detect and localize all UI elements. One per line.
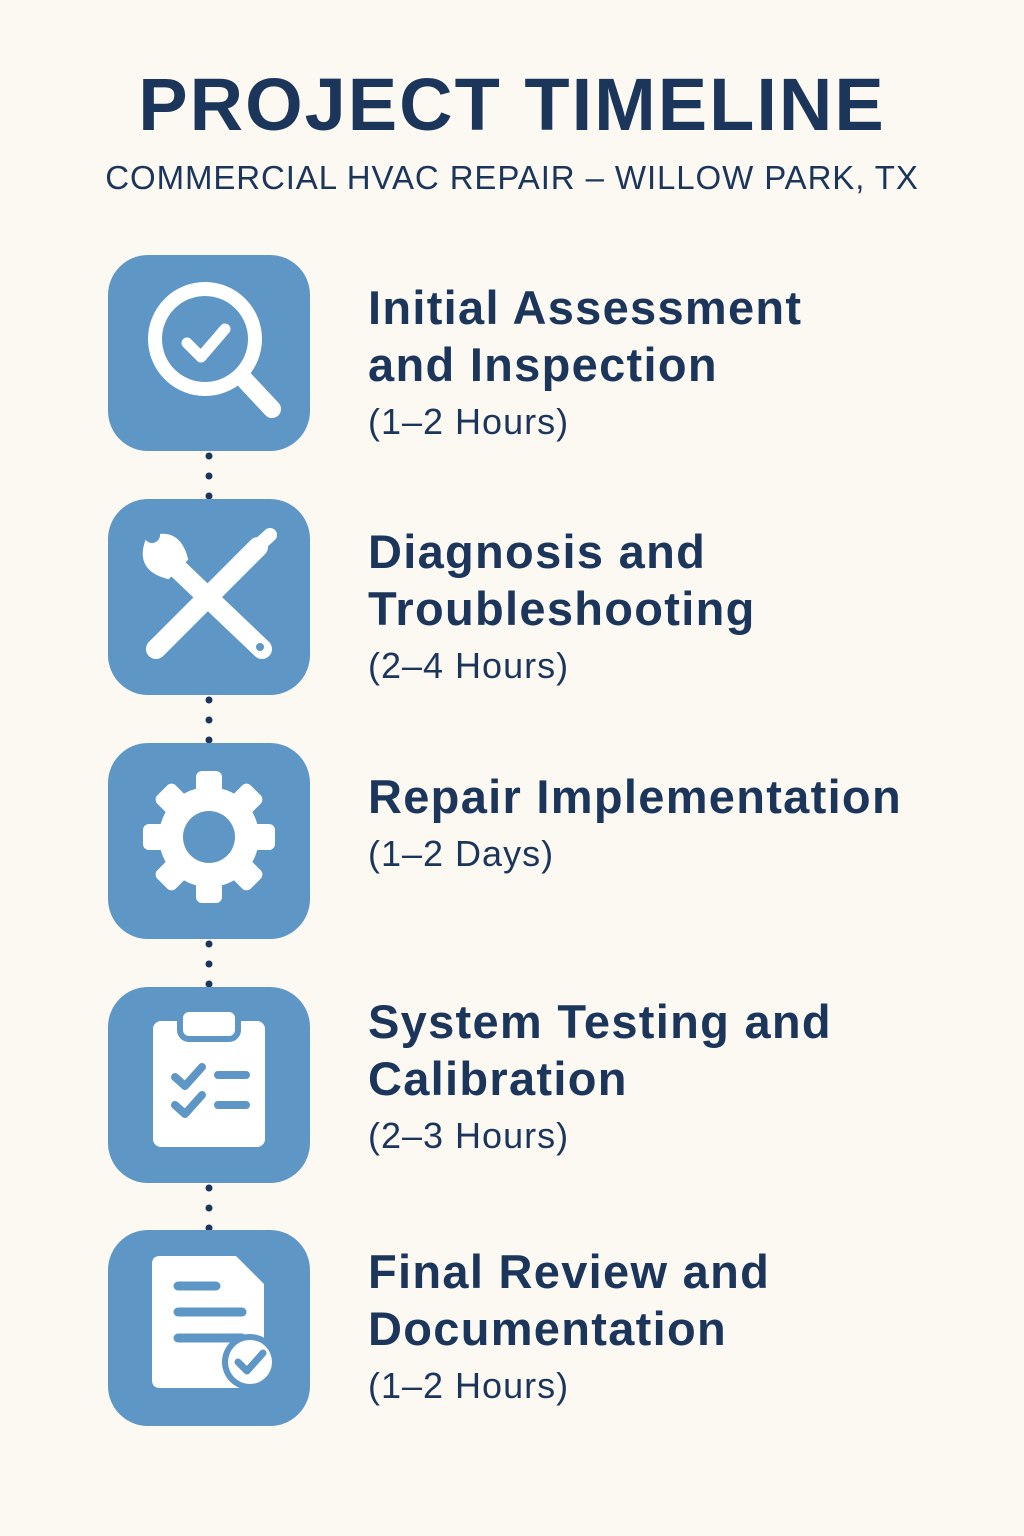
step 2 text: Diagnosis and [368, 525, 706, 578]
step 2 text [368, 525, 756, 686]
subtitle: COMMERCIAL HVAC REPAIR – WILLOW PARK, TX [105, 159, 919, 196]
icon: gear [108, 743, 310, 939]
icon: magnifier check [108, 255, 310, 451]
step 4 text: (2–3 Hours) [368, 1115, 569, 1156]
step 3 text: Repair Implementation [368, 770, 902, 823]
step 3 text [368, 770, 902, 874]
icon: tools [108, 499, 310, 695]
step 1 text: Initial Assessment [368, 281, 802, 334]
step 5 text: (1–2 Hours) [368, 1365, 569, 1406]
step 1 text: (1–2 Hours) [368, 401, 569, 442]
step 3 text: (1–2 Days) [368, 833, 554, 874]
step 2 text: Troubleshooting [368, 582, 756, 635]
step 4 text: System Testing and [368, 995, 832, 1048]
icon: clipboard [108, 987, 310, 1183]
step 4 text: Calibration [368, 1052, 628, 1105]
step 2 text: (2–4 Hours) [368, 645, 569, 686]
connector dots [206, 452, 212, 1230]
step 1 text: and Inspection [368, 338, 718, 391]
title: PROJECT TIMELINE [138, 63, 886, 146]
step 4 text [368, 995, 832, 1156]
step 5 text: Documentation [368, 1302, 727, 1355]
step 1 text [368, 281, 802, 442]
step 5 text [368, 1245, 770, 1406]
icon: document check [108, 1230, 310, 1426]
step 5 text: Final Review and [368, 1245, 770, 1298]
